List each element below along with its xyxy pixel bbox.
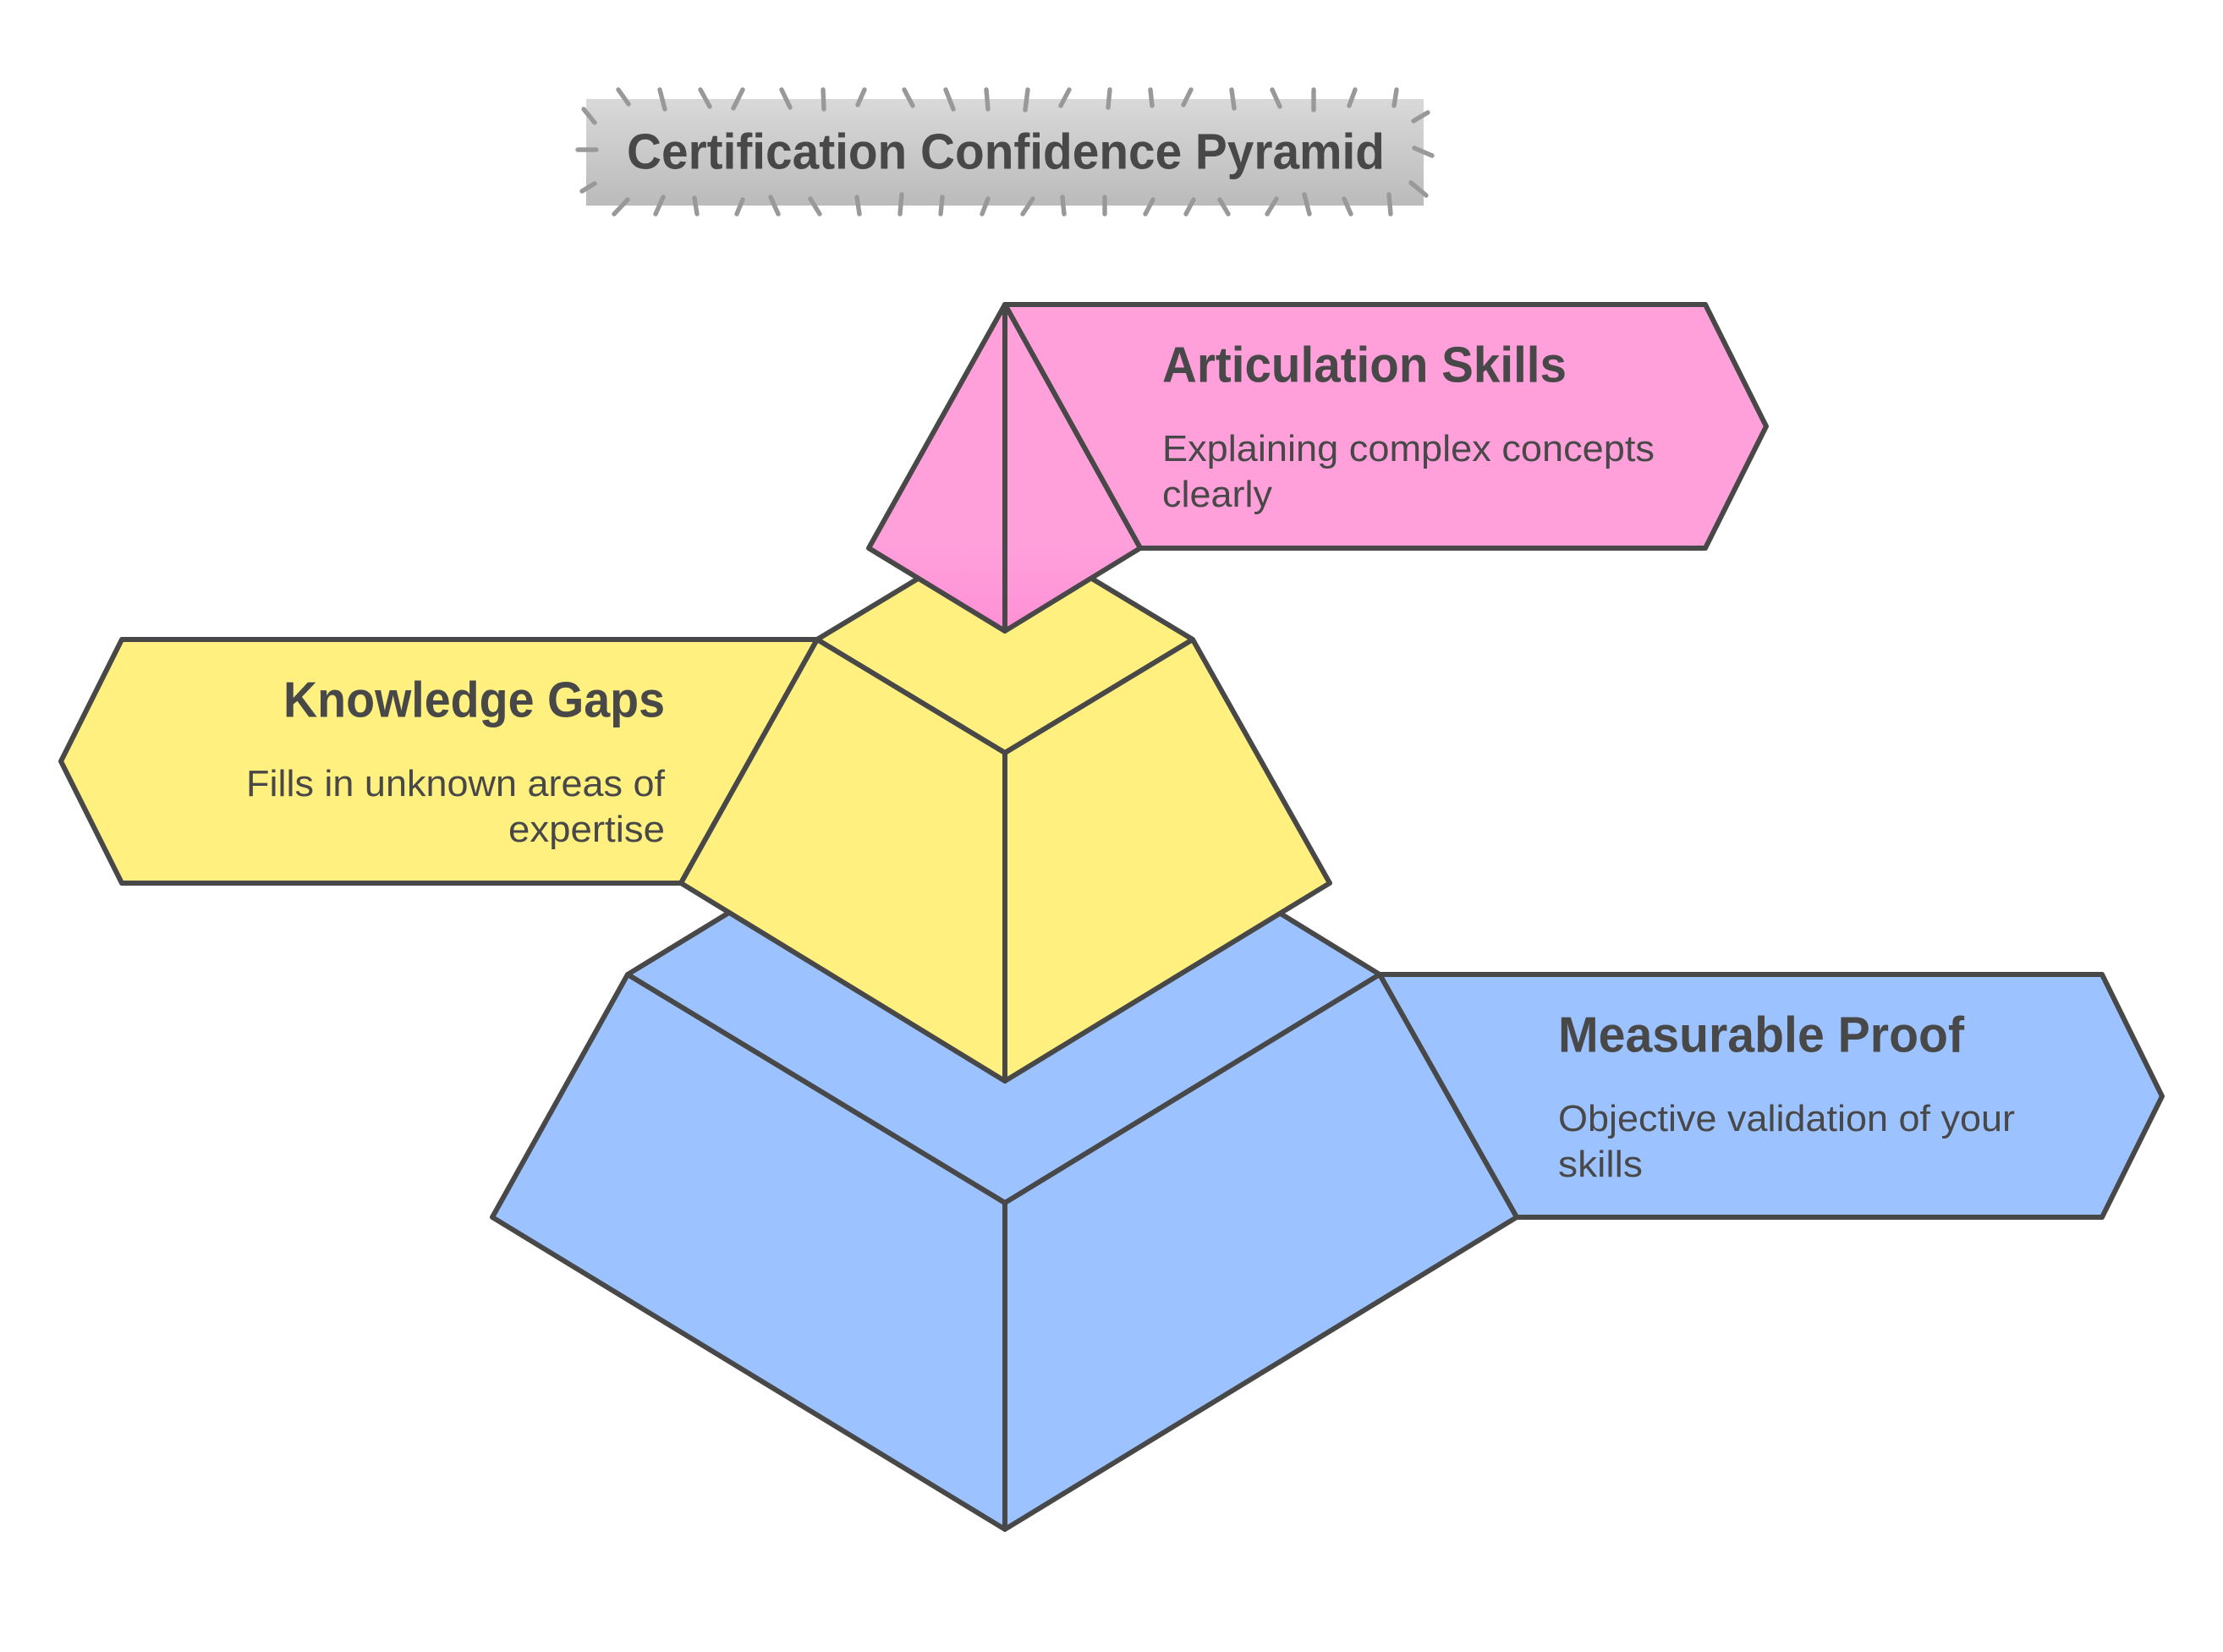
text: knowledge gaps: expertise [508,809,665,850]
title background box [586,99,1424,206]
text: measurable proof: Objective validation of your [1558,1098,2015,1139]
text: articulation skills: Explaining complex concepts [1162,428,1655,469]
label panel: articulation skills [1005,305,1766,548]
text: measurable proof: Measurable Proof [1558,1007,1964,1062]
pyramid apex left face [869,305,1005,631]
label panel: measurable proof [1380,974,2162,1217]
pyramid middle top face [817,526,1193,753]
title sketch ticks [578,90,1432,214]
text: articulation skills [1162,337,1655,515]
text: knowledge gaps: Knowledge Gaps [283,672,665,727]
text: articulation skills: clearly [1162,474,1272,515]
title [578,90,1432,214]
pyramid apex right face [1005,305,1140,631]
title text: Certification Confidence Pyramid [627,123,1385,179]
tier: articulation skills (pink top) [869,305,1766,631]
pyramid middle right face [1005,639,1330,1081]
pyramid base left face [492,974,1005,1529]
text: knowledge gaps: Fills in unknown areas of [246,763,666,804]
text: knowledge gaps [246,672,666,850]
tier: knowledge gaps (yellow middle) [61,526,1330,1081]
pyramid base right face [1005,974,1517,1529]
pyramid middle left face [681,639,1005,1081]
text: measurable proof [1558,1007,2015,1185]
pyramid base top face [628,744,1380,1203]
label panel: knowledge gaps [61,639,817,883]
text: measurable proof: skills [1558,1144,1643,1185]
tier: measurable proof (blue base) [492,744,2162,1529]
text: articulation skills: Articulation Skills [1162,337,1567,392]
